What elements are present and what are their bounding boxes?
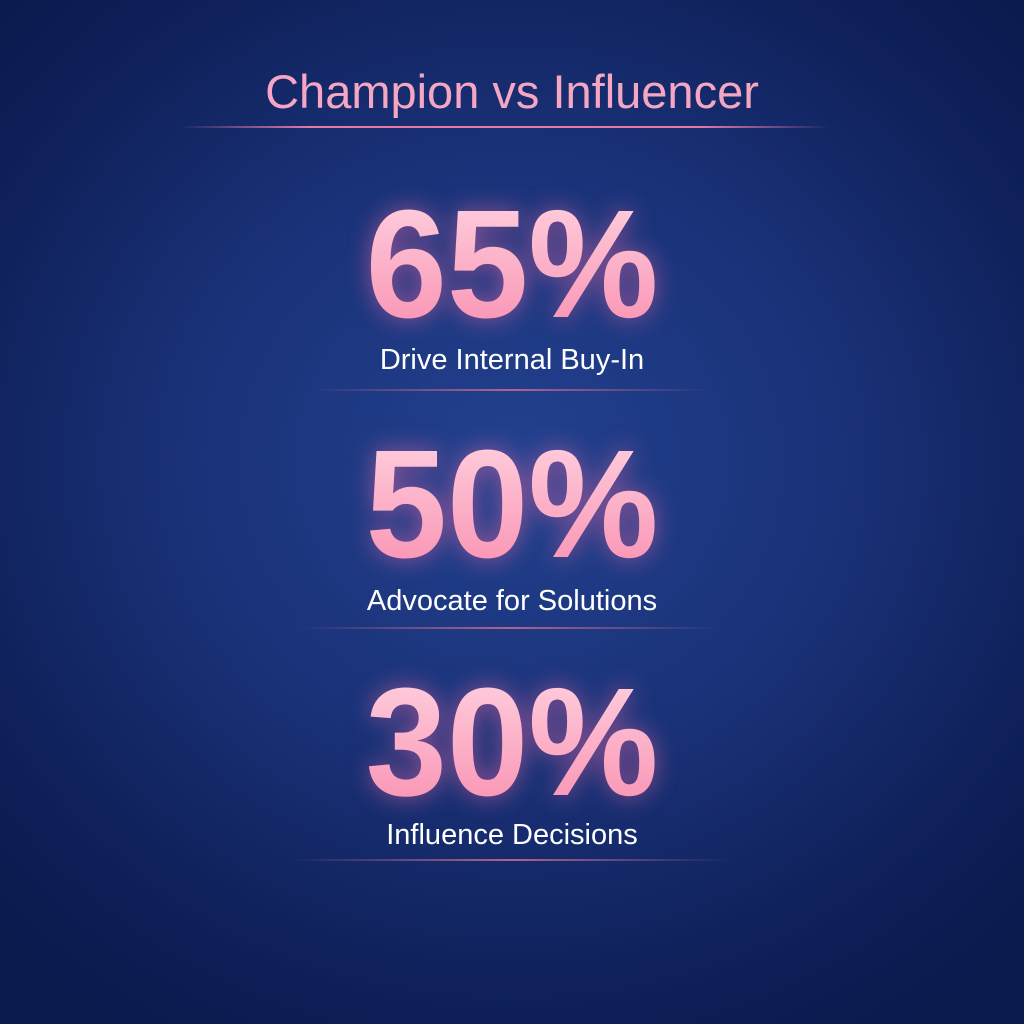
stat: 30% — [358, 656, 670, 851]
stat: 65% — [356, 178, 670, 376]
number 30%: 30% — [366, 656, 658, 828]
title: Champion vs Influencer — [265, 65, 759, 118]
number 65%: 65% — [366, 178, 658, 350]
stat: 50% — [359, 418, 670, 617]
label: Influence Decisions — [386, 819, 638, 851]
number 50% — [26, 427, 998, 581]
number 65% — [26, 187, 998, 341]
label: Advocate for Solutions — [367, 585, 657, 617]
number 50%: 50% — [366, 418, 658, 590]
label: Drive Internal Buy-In — [380, 344, 644, 376]
number 30% — [26, 665, 998, 819]
